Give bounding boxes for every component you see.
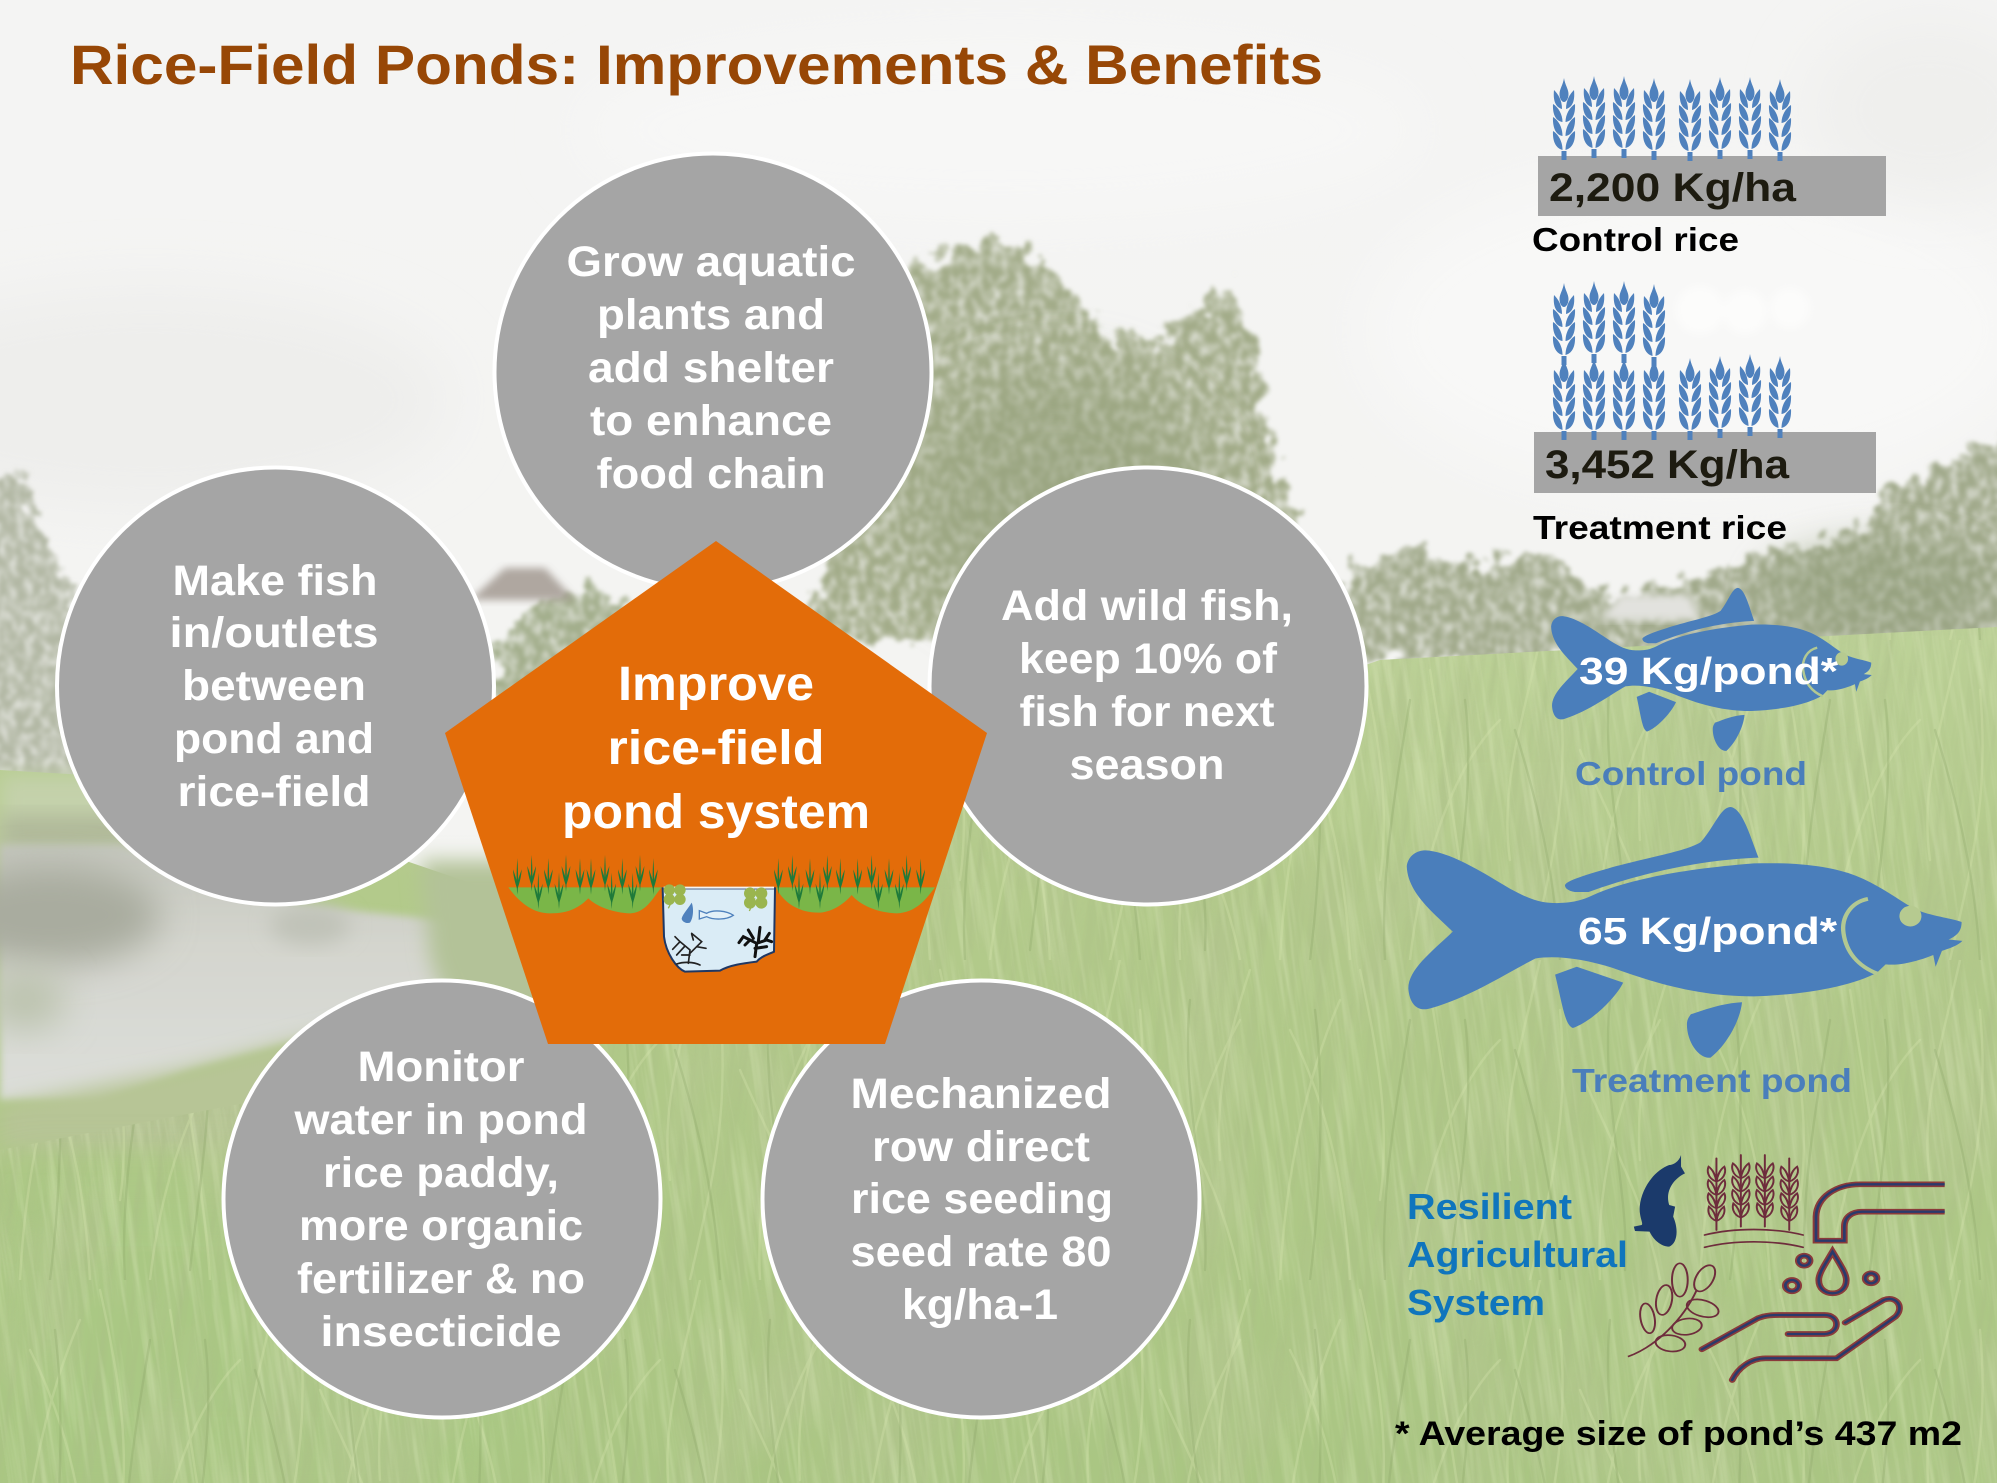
value: 39 Kg/pond* [1579, 651, 1838, 693]
circle: mechanized seeding: kg/ha-1 [902, 1281, 1058, 1329]
circle: fish in/outlets: pond and [174, 715, 374, 763]
pentagon label [562, 658, 870, 839]
label: Control rice [1532, 221, 1739, 258]
circle: add wild fish: fish for next [1020, 688, 1274, 736]
value: 2,200 Kg/ha [1549, 166, 1797, 210]
icon: rice rows [1553, 281, 1791, 440]
circle: grow aquatic plants: plants and [597, 291, 825, 339]
resilient agricultural system heading: Agricultural [1407, 1234, 1628, 1275]
label: Control pond [1575, 755, 1807, 792]
title: Rice-Field Ponds: Improvements & Benefits [70, 33, 1323, 96]
label: Treatment rice [1533, 509, 1787, 546]
circle: monitor water: rice paddy, [323, 1149, 559, 1197]
circle: add wild fish: season [1070, 741, 1224, 789]
circle: grow aquatic plants: to enhance [590, 397, 832, 445]
icon: faucet and drops [1785, 1184, 1945, 1293]
icon: rice field and pond cross-section [508, 855, 935, 972]
circle: monitor water: water in pond [293, 1096, 588, 1144]
icon: large fish [1407, 807, 1962, 1058]
circle: grow aquatic plants: add shelter [588, 344, 834, 392]
footnote: * Average size of pond’s 437 m2 [1395, 1415, 1962, 1453]
circle: grow aquatic plants: food chain [596, 450, 826, 498]
circle: mechanized seeding: seed rate 80 [850, 1228, 1112, 1276]
pentagon label: Improve [618, 658, 814, 711]
circle: add wild fish: keep 10% of [1019, 635, 1278, 683]
resilient agricultural system heading: Resilient [1407, 1186, 1572, 1227]
circle: fish in/outlets [57, 468, 494, 904]
icon: koi fish [1634, 1155, 1685, 1247]
value: 65 Kg/pond* [1578, 911, 1837, 953]
circle: fish in/outlets: between [182, 662, 366, 710]
resilient agricultural system heading: System [1407, 1282, 1545, 1323]
icon: open hand [1702, 1299, 1900, 1380]
circle: fish in/outlets: Make fish [172, 557, 378, 605]
circle: add wild fish [930, 468, 1366, 904]
value: 3,452 Kg/ha [1545, 443, 1790, 487]
circle: monitor water [224, 980, 660, 1418]
pentagon label: rice-field [608, 722, 824, 775]
circle: mechanized seeding: Mechanized [850, 1070, 1112, 1118]
circle: grow aquatic plants: Grow aquatic [566, 238, 856, 286]
circle: mechanized seeding [762, 980, 1200, 1418]
label: Treatment pond [1572, 1062, 1852, 1099]
pentagon label: pond system [562, 786, 870, 839]
circle: monitor water: fertilizer & no [297, 1255, 585, 1303]
icon: rice stalks [1705, 1155, 1803, 1247]
chart: treatment rice yield [1533, 281, 1876, 546]
circle: monitor water: insecticide [320, 1308, 562, 1356]
icon: grain sprig [1628, 1263, 1721, 1357]
chart: treatment pond fish [1407, 807, 1962, 1099]
circle: mechanized seeding: rice seeding [851, 1175, 1113, 1223]
bar: control rice [1538, 156, 1886, 216]
central pentagon [445, 541, 987, 1044]
circle: grow aquatic plants [494, 154, 932, 590]
resilient agricultural system heading [1407, 1186, 1628, 1323]
icon group: fish, rice, water, grain, hand [1628, 1155, 1945, 1380]
circle: monitor water: Monitor [358, 1043, 525, 1091]
icon: small fish [1551, 588, 1872, 751]
chart: control rice yield [1532, 76, 1886, 258]
bar: treatment rice [1534, 432, 1876, 493]
circle: fish in/outlets: in/outlets [170, 609, 378, 657]
circle: add wild fish: Add wild fish, [1001, 582, 1293, 630]
icon: rice row [1553, 76, 1791, 161]
chart: control pond fish [1551, 588, 1872, 792]
circle: fish in/outlets: rice-field [178, 768, 370, 816]
circle: mechanized seeding: row direct [872, 1123, 1090, 1171]
circle: monitor water: more organic [299, 1202, 583, 1250]
